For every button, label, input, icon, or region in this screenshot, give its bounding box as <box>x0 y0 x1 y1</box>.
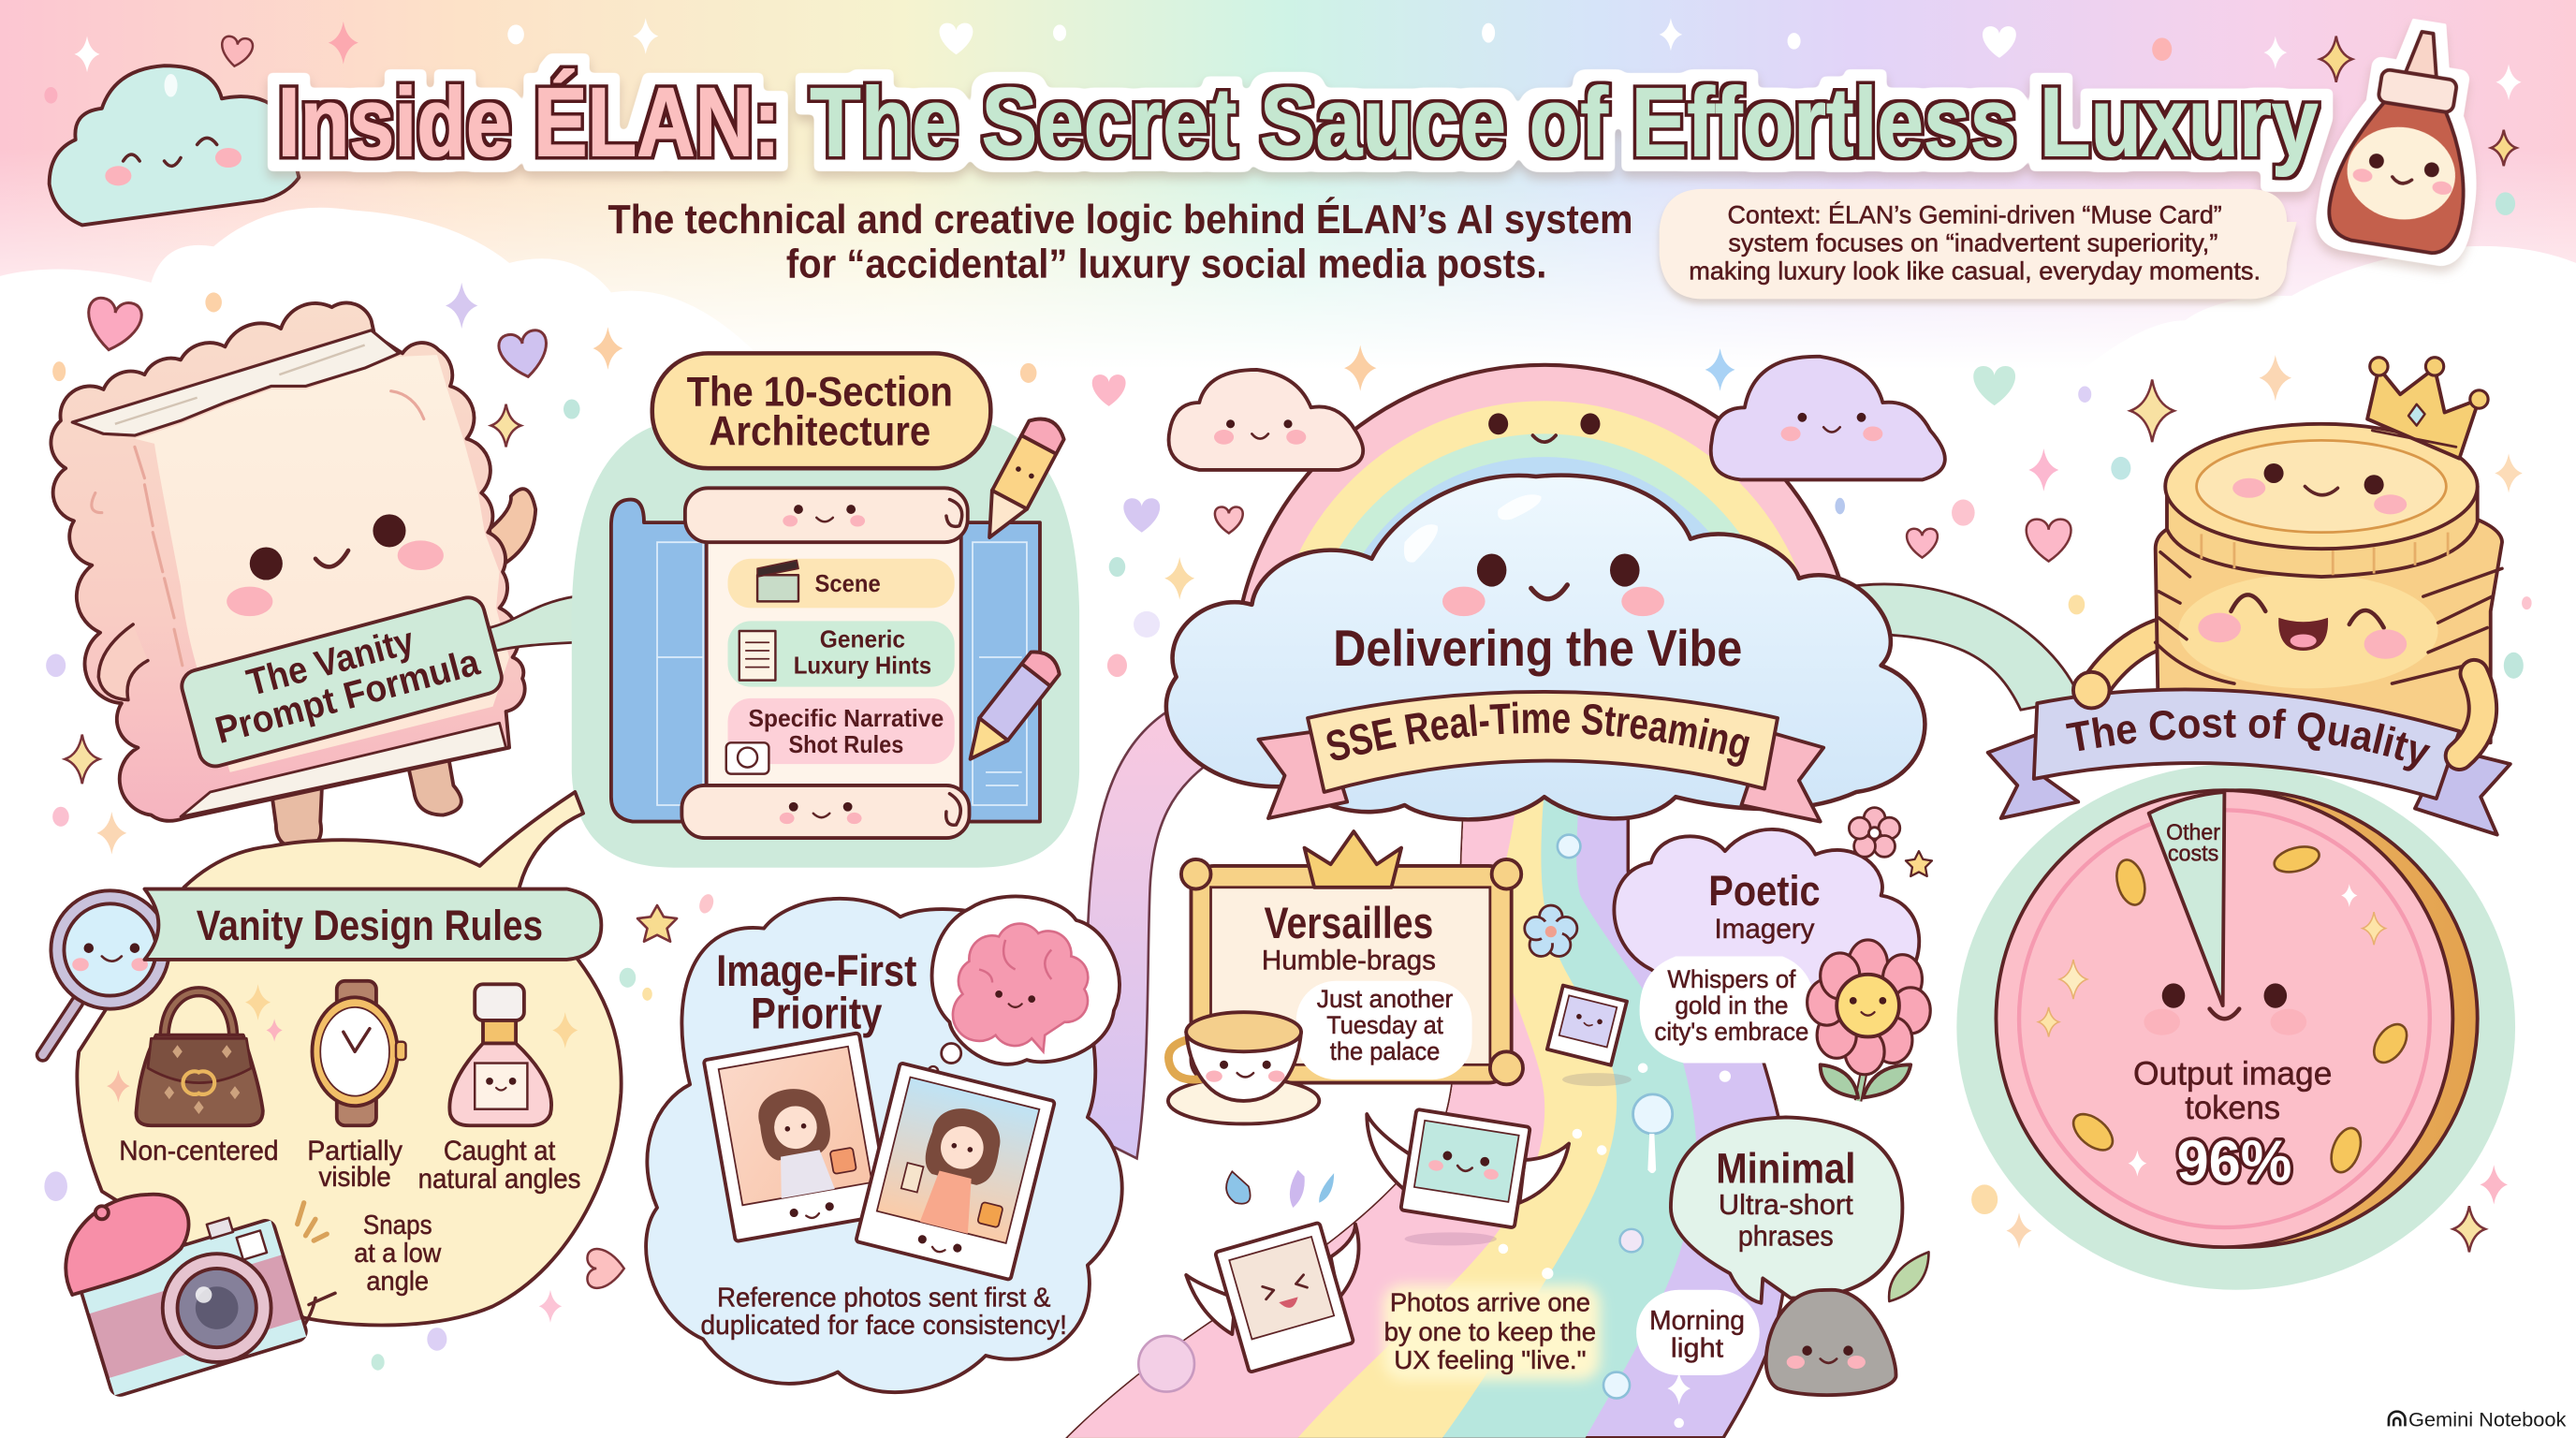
icon: top pink flower <box>1849 808 1900 857</box>
icon: coin stack mascot <box>2093 424 2502 742</box>
panel: vanity design rules <box>43 792 622 1398</box>
title: Inside ÉLAN: <box>278 68 781 178</box>
speech bubble <box>1671 1117 1902 1303</box>
callout: context note: Context: ÉLAN’s Gemini-driven “Muse Card” <box>1727 200 2222 229</box>
icon: fluffy book mascot <box>51 302 525 821</box>
scroll paper <box>681 488 970 838</box>
chart: pie coin, output image tokens vs other costs <box>1996 790 2478 1247</box>
heading: poetic imagery <box>1708 867 1821 945</box>
icon: coin mascot hands <box>2073 672 2482 756</box>
quote bubble: whispers of gold: gold in the <box>1675 990 1788 1020</box>
panel: versailles humble-brags <box>1168 831 1523 1123</box>
banner: the cost of quality: The Cost of Quality <box>2065 708 2431 771</box>
banner: the cost of quality <box>1986 687 2512 837</box>
droplets <box>1226 1170 1334 1208</box>
icon: gold star <box>1906 851 1932 876</box>
panel: poetic imagery <box>1614 808 1932 1101</box>
text: photos arrive one by one: UX feeling "live." <box>1394 1345 1587 1374</box>
photo: reference photo two <box>856 1063 1055 1280</box>
icon: cream cloud <box>1169 370 1363 470</box>
heading: delivering the vibe: Delivering the Vibe <box>1333 620 1742 677</box>
icon: winged polaroid lower <box>1186 1223 1359 1372</box>
icon: small polaroid <box>1547 986 1627 1065</box>
label: partially visible: Partially <box>307 1136 402 1167</box>
icon: wristwatch <box>312 981 406 1125</box>
quote bubble: whispers of gold <box>1640 956 1815 1064</box>
title <box>278 68 2318 178</box>
icon: secret sauce bottle <box>2325 22 2489 257</box>
label: the vanity prompt formula: Prompt Formula <box>211 639 484 752</box>
lavender cloud <box>1614 829 1919 994</box>
text: photos arrive one by one <box>1383 1284 1600 1380</box>
mini coins in pie <box>2067 843 2413 1176</box>
panel: image-first priority <box>646 896 1122 1392</box>
sparkles in pie <box>2039 884 2385 1177</box>
icon: purple pencil <box>956 646 1064 770</box>
yellow blob background with tail <box>77 792 622 1325</box>
quote bubble: just another tuesday: Just another <box>1317 984 1453 1013</box>
label: output image tokens 96% <box>2133 1055 2332 1195</box>
quote bubble: morning light: Morning <box>1649 1306 1745 1336</box>
label: snaps at a low angle: at a low <box>354 1239 441 1269</box>
panel: the 10-section architecture <box>572 353 1079 868</box>
callout: context note: making luxury look like casual, everyday moments. <box>1689 256 2261 285</box>
mint circle background <box>1956 764 2515 1290</box>
label: partially visible <box>307 1136 402 1193</box>
heading: minimal ultra-short phrases <box>1716 1145 1855 1252</box>
cloud background <box>646 899 1122 1392</box>
mint panel background <box>572 419 1079 868</box>
icon: yellow pencil <box>972 412 1069 547</box>
item: generic luxury hints: Luxury Hints <box>794 653 931 680</box>
label: snaps at a low angle <box>354 1211 441 1297</box>
connector: mint band from cloud to cost of quality <box>1840 584 2080 710</box>
icon: rock <box>1766 1252 1928 1395</box>
icon: lavender cloud <box>1711 357 1945 479</box>
heading: poetic imagery: Poetic <box>1708 867 1821 915</box>
thought bubble with brain <box>929 896 1120 1077</box>
heading: versailles humble-brags: Humble-brags <box>1262 946 1436 976</box>
item: generic luxury hints <box>728 621 955 687</box>
heading ribbon: vanity design rules <box>144 889 601 960</box>
item: generic luxury hints: Generic <box>820 627 905 653</box>
label: snaps at a low angle: angle <box>366 1267 429 1297</box>
icon: magnifying glass <box>43 890 169 1055</box>
label: other costs <box>2166 821 2220 867</box>
panel: the cost of quality <box>1956 356 2515 1290</box>
quote bubble: whispers of gold: city's embrace <box>1654 1017 1808 1046</box>
panel: minimal ultra-short phrases <box>1636 1117 1928 1395</box>
icon: camera with beret <box>66 1195 335 1398</box>
heading pill: the 10-section architecture <box>652 353 990 468</box>
icon: handbag <box>137 991 263 1125</box>
callout: context note <box>1660 189 2297 299</box>
heading pill: the 10-section architecture: Architecture <box>709 408 930 455</box>
icon: smiling flower <box>1808 940 1930 1101</box>
heading: versailles humble-brags: Versailles <box>1265 899 1433 948</box>
subtitle: The technical and creative logic behind ÉLAN’s AI system <box>607 196 1633 242</box>
panel: delivering the vibe cloud <box>1164 473 1927 824</box>
icon: book legs and raised arm <box>271 489 535 848</box>
quote bubble: whispers of gold: Whispers of <box>1667 964 1796 993</box>
text: photos arrive one by one: by one to keep the <box>1384 1317 1596 1346</box>
item: specific narrative shot rules <box>726 698 955 774</box>
label: output image tokens 96%: 96% <box>2177 1129 2291 1195</box>
label: the vanity prompt formula <box>178 594 505 770</box>
icon: crown <box>1305 831 1401 888</box>
caption: reference photos: duplicated for face consistency! <box>701 1311 1067 1341</box>
icon: blue flower <box>1525 905 1577 956</box>
big cloud with face <box>1166 476 1925 819</box>
label: other costs: costs <box>2168 843 2218 867</box>
callout: context note: system focuses on “inadvertent superiority,” <box>1728 228 2217 257</box>
heading pill: the 10-section architecture: The 10-Section <box>687 369 953 416</box>
label: snaps at a low angle: Snaps <box>363 1211 432 1240</box>
title: The Secret Sauce of Effortless Luxury <box>810 68 2318 178</box>
blueprint sheet <box>611 500 1040 822</box>
heading: minimal ultra-short phrases: Ultra-short <box>1719 1188 1853 1221</box>
heading: versailles humble-brags <box>1262 899 1436 976</box>
label: caught at natural angles: natural angles <box>418 1164 580 1195</box>
quote bubble: morning light: light <box>1671 1334 1723 1364</box>
rainbow road flowing from the cloud <box>1068 788 1790 1438</box>
heading: minimal ultra-short phrases: phrases <box>1738 1219 1834 1252</box>
ornate gold frame <box>1181 859 1523 1084</box>
icon: gold crown <box>2367 358 2488 459</box>
banner: sse real-time streaming: SSE Real-Time Streaming <box>1327 702 1750 767</box>
label: other costs: Other <box>2166 821 2220 845</box>
footer: gemini notebook mark: Gemini Notebook <box>2408 1409 2567 1431</box>
label: non-centered: Non-centered <box>119 1136 278 1167</box>
item: specific narrative shot rules: Specific Narrative <box>748 706 944 732</box>
heading ribbon: vanity design rules: Vanity Design Rules <box>197 902 543 949</box>
subtitle <box>607 196 1633 287</box>
caption: reference photos: Reference photos sent first & <box>717 1283 1050 1313</box>
panel: the vanity prompt formula <box>51 302 575 848</box>
label: caught at natural angles: Caught at <box>444 1136 556 1167</box>
quote bubble: just another tuesday: Tuesday at <box>1326 1010 1443 1039</box>
heading: image-first priority: Image-First <box>716 946 917 996</box>
connector ribbon: from cloud down to image-first cloud <box>1088 710 1208 1158</box>
banner: sse real-time streaming <box>1256 690 1825 824</box>
icon: teacup <box>1168 1012 1319 1123</box>
quote bubble: just another tuesday: the palace <box>1330 1036 1440 1065</box>
label: caught at natural angles <box>418 1136 580 1195</box>
item: specific narrative shot rules: Shot Rules <box>788 732 903 758</box>
quote bubble: just another tuesday <box>1296 981 1472 1079</box>
sparkles near items <box>107 984 578 1103</box>
label: output image tokens 96%: tokens <box>2185 1090 2280 1126</box>
heading: poetic imagery: Imagery <box>1714 914 1815 945</box>
rainbow arch <box>1234 365 1855 675</box>
heading: minimal ultra-short phrases: Minimal <box>1716 1145 1855 1193</box>
caption: reference photos <box>701 1283 1067 1341</box>
heading: image-first priority: Priority <box>751 990 883 1039</box>
quote bubble: morning light <box>1636 1290 1760 1375</box>
icon: mint cloud mascot <box>50 66 299 225</box>
label: output image tokens 96%: Output image <box>2133 1055 2332 1092</box>
text: photos arrive one by one: Photos arrive one <box>1390 1288 1590 1317</box>
icon: perfume bottle <box>449 984 551 1125</box>
heading: image-first priority <box>716 946 917 1039</box>
item: scene: Scene <box>815 571 881 597</box>
connector: mint band from prompt book to architecture panel <box>490 596 575 651</box>
label: partially visible: visible <box>318 1162 391 1193</box>
subtitle: for “accidental” luxury social media posts. <box>786 242 1546 287</box>
photo: reference photo one <box>704 1033 891 1241</box>
label: the vanity prompt formula: The Vanity <box>242 618 418 704</box>
icon: winged polaroid upper <box>1367 1109 1569 1228</box>
item: scene <box>728 559 955 608</box>
